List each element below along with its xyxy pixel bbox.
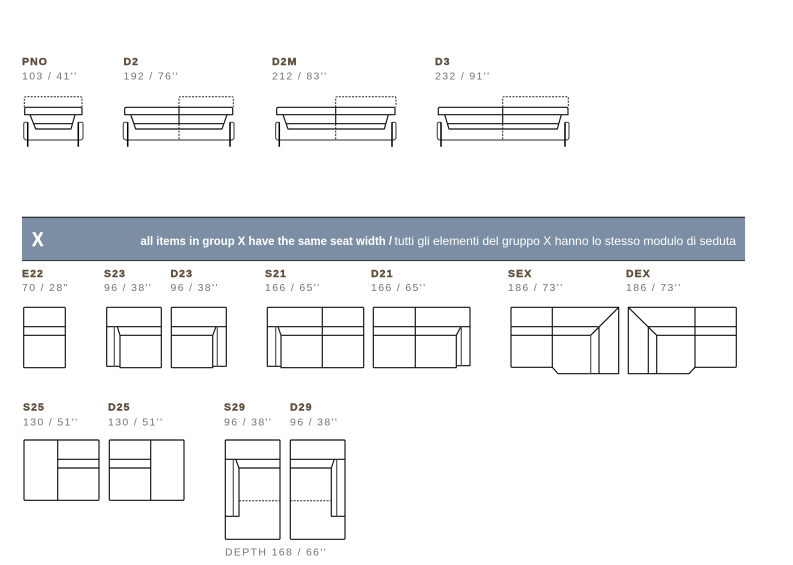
sofa D2M: label and front view bbox=[272, 56, 396, 147]
module D25: D25 bbox=[108, 402, 131, 414]
sofa D3: label and front view: D3 bbox=[435, 56, 451, 68]
module D29: 96 / 38'' bbox=[290, 417, 338, 429]
module E22: E22 bbox=[22, 268, 44, 280]
sofa D2: label and front view: 192 / 76'' bbox=[124, 70, 179, 82]
module E22 bbox=[22, 268, 69, 368]
module S29: S29 bbox=[224, 402, 246, 414]
module DEX: DEX bbox=[626, 268, 651, 280]
module SEX: 186 / 73'' bbox=[508, 282, 563, 294]
module D21: D21 bbox=[371, 268, 394, 280]
module D25 bbox=[108, 402, 184, 500]
module S21: 166 / 65'' bbox=[265, 282, 320, 294]
group X header band bbox=[22, 217, 745, 261]
module D23 bbox=[170, 268, 226, 368]
sofa D2: label and front view: D2 bbox=[124, 56, 139, 68]
module S23: S23 bbox=[104, 268, 126, 280]
band caption: tutti gli elementi del gruppo X hanno lo stesso modulo di seduta bbox=[394, 234, 736, 248]
module S25: S25 bbox=[23, 402, 45, 414]
sofa PNO: label and front view: PNO bbox=[22, 56, 48, 68]
module SEX bbox=[508, 268, 619, 374]
sofa D3: label and front view: 232 / 91'' bbox=[435, 70, 490, 82]
sofa PNO: label and front view bbox=[22, 56, 83, 147]
module S25: 130 / 51'' bbox=[23, 417, 78, 429]
band caption: all items in group X have the same seat width / bbox=[140, 234, 393, 248]
module D21 bbox=[371, 268, 470, 368]
sofa D2M: label and front view: 212 / 83'' bbox=[272, 70, 327, 82]
module D29 bbox=[290, 402, 345, 539]
module S29: 96 / 38'' bbox=[224, 417, 272, 429]
module S23 bbox=[104, 268, 161, 368]
module DEX: 186 / 73'' bbox=[626, 282, 681, 294]
sofa D2M: label and front view: D2M bbox=[272, 56, 297, 68]
module S21: S21 bbox=[265, 268, 287, 280]
sofa PNO: label and front view: 103 / 41'' bbox=[22, 70, 77, 82]
module S21 bbox=[265, 268, 364, 368]
group letter X: X bbox=[32, 230, 44, 251]
module S23: 96 / 38'' bbox=[104, 282, 152, 294]
module D29: D29 bbox=[290, 402, 313, 414]
sofa D3: label and front view bbox=[435, 56, 569, 147]
sofa D2: label and front view bbox=[123, 56, 234, 147]
module SEX: SEX bbox=[508, 268, 532, 280]
module DEX bbox=[626, 268, 736, 374]
module S29 bbox=[224, 402, 280, 539]
module D23: D23 bbox=[170, 268, 193, 280]
module D21: 166 / 65'' bbox=[371, 282, 426, 294]
depth note: DEPTH 168 / 66'' bbox=[225, 546, 327, 558]
module D23: 96 / 38'' bbox=[170, 282, 219, 294]
module E22: 70 / 28" bbox=[22, 282, 69, 294]
module D25: 130 / 51'' bbox=[108, 417, 163, 429]
module S25 bbox=[23, 402, 99, 500]
